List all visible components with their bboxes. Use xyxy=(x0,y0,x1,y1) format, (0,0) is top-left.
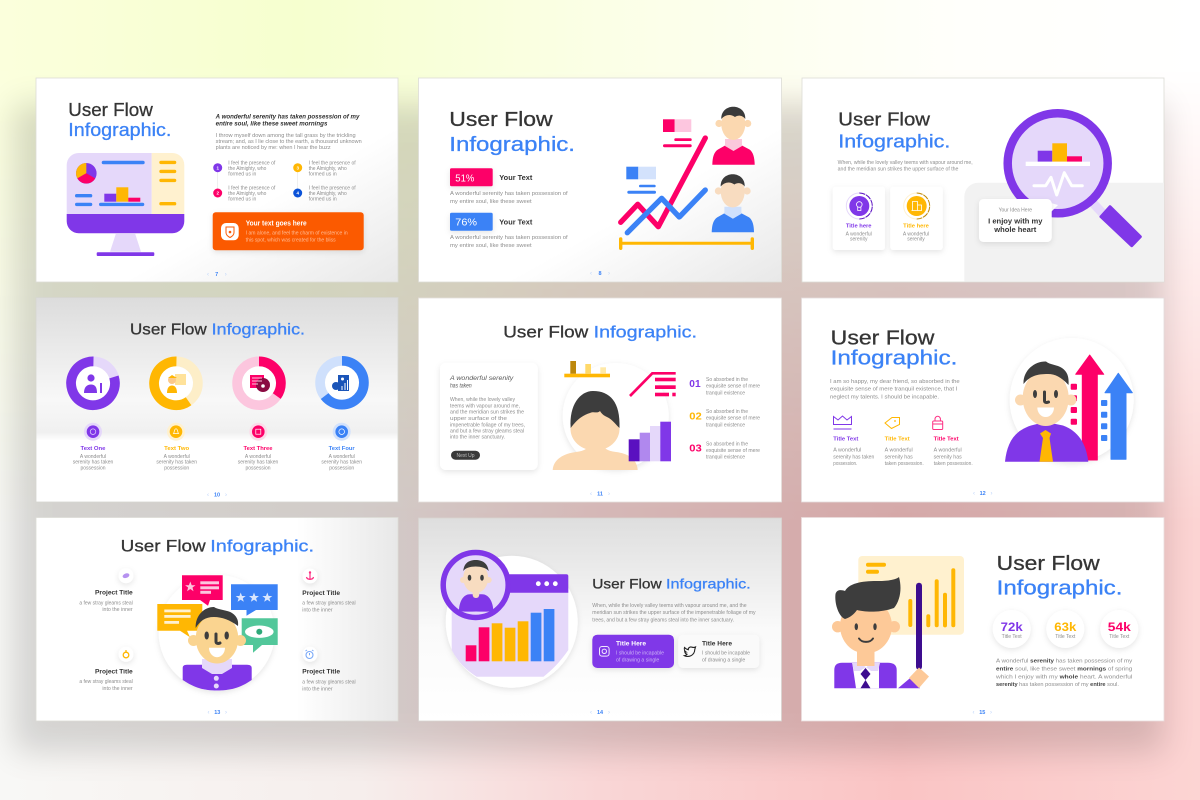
list: numbered points: the Almighty, who xyxy=(228,191,267,197)
title: User Flow xyxy=(130,321,207,338)
page number: ‹ xyxy=(972,710,974,716)
page number: ‹ xyxy=(973,491,975,497)
feature: tag: A wonderful xyxy=(885,448,913,454)
stat: 72k: Title Text xyxy=(1002,634,1022,640)
list: item 02: exquisite sense of mere xyxy=(706,416,760,422)
panel: slide 7 monitor xyxy=(36,78,398,282)
item: Text One xyxy=(73,423,114,471)
card: purple title: serenity xyxy=(850,237,868,243)
stat: 51%: 51% xyxy=(455,172,474,184)
page number: › xyxy=(225,710,227,716)
text block xyxy=(996,659,1133,688)
item: Text Two: serenity has taken xyxy=(156,459,197,465)
browser window with bar chart xyxy=(452,574,568,677)
page number xyxy=(208,710,227,716)
feature: tag: serenity has xyxy=(885,454,913,460)
text block: intro: I throw myself down among the tall grass by the trickling xyxy=(216,133,356,139)
stat: 76% xyxy=(450,213,568,249)
stat: 54k: Title Text xyxy=(1109,634,1130,640)
icon: pink line list xyxy=(630,373,676,396)
page number: › xyxy=(608,271,610,277)
stat: 63k: 63k xyxy=(1054,620,1077,634)
page number: ‹ xyxy=(590,271,592,277)
item: Text Two: A wonderful xyxy=(164,454,190,460)
stat: 76%: 76% xyxy=(455,217,477,229)
title xyxy=(592,575,751,591)
title xyxy=(838,109,950,151)
title xyxy=(997,553,1122,599)
card: yellow title: Title here xyxy=(903,224,929,230)
stat: 76%: A wonderful serenity has taken possession of xyxy=(450,235,568,241)
title xyxy=(121,537,314,556)
panel: slide 14 dashboard xyxy=(418,518,782,721)
arrow: pink xyxy=(1071,355,1104,460)
item: Text One: Text One xyxy=(80,446,106,452)
card: twitter: I should be incapable xyxy=(702,650,750,656)
list: numbered points: the Almighty, who xyxy=(309,166,347,172)
text block: When, while the lovely valley teems with vapour around me, and the xyxy=(592,603,747,609)
title: User Flow xyxy=(831,327,935,349)
text block: intro: entire soul, like these sweet mornings xyxy=(216,122,328,128)
panel: slide 13 speech bubbles xyxy=(36,518,398,721)
item: Text Two xyxy=(156,423,197,471)
page number: › xyxy=(990,710,992,716)
page number: ‹ xyxy=(208,710,210,716)
page number: › xyxy=(990,491,992,497)
feature: bag: A wonderful xyxy=(934,448,962,454)
icon: man avatar xyxy=(183,607,252,690)
text block: intro: plants are noticed by me: when I hear the buzz xyxy=(216,145,331,151)
speech bubble: yellow xyxy=(157,604,202,637)
arrow: blue xyxy=(1101,373,1132,459)
feature: bag: serenity has xyxy=(934,454,962,460)
item: Text Four: serenity has taken xyxy=(321,459,362,465)
list: item 02: So absorbed in the xyxy=(706,409,748,415)
title: User Flow xyxy=(121,537,206,556)
title: User Flow xyxy=(68,100,154,120)
item: project bottom left: Project Title xyxy=(95,669,133,675)
item: Text Three: Text Three xyxy=(244,446,272,452)
item: Text One: serenity has taken xyxy=(73,459,114,465)
text block: neglect my talents. I should be incapable. xyxy=(830,394,939,400)
card: instagram xyxy=(592,635,674,668)
panel: slide 15 presenter xyxy=(802,518,1164,721)
card: text block with button: upper surface of the xyxy=(450,416,507,422)
text block: which I enjoy with my whole heart. A wonderful xyxy=(996,674,1132,680)
list: numbered points: I feel the presence of xyxy=(309,161,356,167)
text block: entire soul, like these sweet mornings of spring xyxy=(996,667,1133,673)
item: project bottom right: into the inner xyxy=(302,686,333,692)
page number xyxy=(590,492,610,498)
title: Infographic. xyxy=(838,131,950,151)
item: Text Two: Text Two xyxy=(164,446,190,452)
text block: When, while the lovely valley teems with vapour around me, xyxy=(838,160,973,166)
card: purple title xyxy=(833,187,885,250)
page number: › xyxy=(608,710,610,716)
page number: › xyxy=(225,492,227,498)
callout: orange text box: this spot, which was created for the bliss xyxy=(246,237,336,243)
page number: 11 xyxy=(597,492,603,498)
card: instagram: Title Here xyxy=(616,640,646,647)
stat: 76%: my entire soul, like these sweet xyxy=(450,243,532,249)
item: project bottom right xyxy=(302,647,356,692)
feature: crown: serenity has taken xyxy=(833,454,875,460)
panel: slide 9 magnifier xyxy=(802,78,1164,282)
item: Text Three: possession xyxy=(245,465,271,471)
text block: trees, and but a few stray gleams steal into the inner sanctuary. xyxy=(592,617,734,623)
decorative white circle xyxy=(159,575,275,691)
item: Text Four: possession xyxy=(329,465,354,471)
card: yellow title: serenity xyxy=(907,237,925,243)
list: numbered points: formed us in xyxy=(228,197,257,203)
title: Infographic. xyxy=(212,321,305,338)
title xyxy=(449,109,575,156)
page number: 13 xyxy=(214,710,220,716)
item: project top right: Project Title xyxy=(302,591,341,597)
list: item 01: So absorbed in the xyxy=(706,377,748,383)
item: Text Three: A wonderful xyxy=(245,454,271,460)
title: Infographic. xyxy=(449,134,575,156)
list: item 02: 02 xyxy=(689,410,702,422)
card: twitter: of drawing a single xyxy=(702,658,746,664)
item: Text Four: Text Four xyxy=(329,446,356,452)
item: project top right: a few stray gleams steal xyxy=(302,601,356,607)
feature: crown: A wonderful xyxy=(833,448,861,454)
callout: idea card: Your Idea Here xyxy=(999,208,1032,214)
title: User Flow xyxy=(503,323,589,342)
decorative white circle xyxy=(446,556,578,688)
feature: bag: taken possession. xyxy=(934,461,973,467)
page number xyxy=(972,710,992,716)
item: Text Three: serenity has taken xyxy=(238,459,279,465)
title: User Flow xyxy=(592,575,663,591)
text block xyxy=(838,160,973,173)
list: item 02 xyxy=(689,409,760,428)
stat: 63k: Title Text xyxy=(1055,634,1076,640)
bar chart: yellow shelf xyxy=(564,361,610,377)
list: item 01: exquisite sense of mere xyxy=(706,384,760,390)
list: numbered points: 3 xyxy=(296,165,299,170)
list: numbered points: I feel the presence of xyxy=(228,161,276,167)
stat: 51%: A wonderful serenity has taken possession of xyxy=(450,191,568,197)
item: Text One: A wonderful xyxy=(80,454,106,460)
line chart with flags xyxy=(621,119,752,248)
decorative white circle xyxy=(1010,338,1134,462)
item: project bottom right: Project Title xyxy=(302,670,341,676)
stat: 76%: Your Text xyxy=(499,219,533,226)
item: project top left: Project Title xyxy=(95,591,133,597)
stat: 54k: 54k xyxy=(1108,620,1131,634)
title: Infographic. xyxy=(594,323,697,342)
list: item 01: 01 xyxy=(689,378,701,390)
card: yellow title: A wonderful xyxy=(903,232,929,238)
title: Infographic. xyxy=(997,577,1122,599)
list: numbered points: I feel the presence of xyxy=(309,186,356,192)
grey corner block xyxy=(964,183,1164,282)
callout: orange text box xyxy=(213,212,364,250)
page number: ‹ xyxy=(590,710,592,716)
panel: slide 10 donuts xyxy=(36,298,398,502)
page number xyxy=(207,492,227,498)
feature: tag: taken possession. xyxy=(885,461,924,467)
page number xyxy=(973,491,992,497)
card: text block with button: into the inner sanctuary. xyxy=(450,435,505,441)
list: item 02: tranquil existence xyxy=(706,422,745,428)
stat: 54k xyxy=(1100,610,1138,648)
callout: orange text box: Your text goes here xyxy=(246,220,307,227)
icon: desktop monitor with charts xyxy=(67,153,184,256)
icon: person pink xyxy=(712,107,755,165)
card: text block with button: and but a few stray gleams steal xyxy=(450,429,524,435)
icon: person portrait xyxy=(553,391,638,470)
panel: slide 11 portrait xyxy=(418,298,782,502)
text block: exquisite sense of mere tranquil existence, that I xyxy=(830,387,957,393)
text block: meridian sun strikes the upper surface of the impenetrable foliage of my xyxy=(592,610,756,616)
item: project bottom left: a few stray gleams steal xyxy=(79,679,133,685)
item: project top right: into the inner xyxy=(302,607,333,613)
stat: 51%: Your Text xyxy=(499,175,533,182)
icon: smiling man with tie xyxy=(1005,361,1088,462)
text block: intro: A wonderful serenity has taken possession of my xyxy=(215,114,360,120)
item: Text Three xyxy=(238,423,279,471)
item: Text Two: possession xyxy=(164,465,189,471)
list: numbered points: 1 xyxy=(216,165,219,170)
card: text block with button: and the meridian sun strikes the xyxy=(450,410,524,416)
text block: and the meridian sun strikes the upper surface of the xyxy=(838,167,959,173)
list: item 01 xyxy=(689,377,760,396)
bar chart: purple xyxy=(629,422,671,461)
card: text block with button xyxy=(440,363,538,470)
item: Text Four: A wonderful xyxy=(329,454,355,460)
page number: 15 xyxy=(979,710,985,716)
title: Infographic. xyxy=(210,537,314,556)
card: text block with button: has taken xyxy=(450,382,472,389)
title xyxy=(68,100,171,140)
list: item 03: So absorbed in the xyxy=(706,441,748,447)
page number xyxy=(590,271,610,277)
title: User Flow xyxy=(449,109,553,131)
page number: ‹ xyxy=(207,492,209,498)
item: project top left: a few stray gleams steal xyxy=(79,600,133,606)
list: item 03: tranquil existence xyxy=(706,455,745,461)
text block: intro xyxy=(215,114,362,151)
page number: › xyxy=(608,492,610,498)
item: project bottom left: into the inner xyxy=(102,686,133,692)
list: item 03: 03 xyxy=(689,442,702,454)
icon: presentation board xyxy=(858,556,964,635)
icon: person blue xyxy=(712,174,754,232)
card: text block with button: teems with vapour around me, xyxy=(450,403,520,409)
title: Infographic. xyxy=(68,120,171,140)
list: item 03: exquisite sense of mere xyxy=(706,448,760,454)
callout: idea card: whole heart xyxy=(993,225,1037,234)
list: numbered points: 4 xyxy=(296,191,299,196)
list: numbered points: the Almighty, who xyxy=(228,166,267,172)
title: User Flow xyxy=(838,109,931,129)
feature: bag xyxy=(933,416,973,467)
list: numbered points: formed us in xyxy=(309,172,337,178)
page number: 12 xyxy=(980,491,986,497)
feature: crown: possession. xyxy=(833,461,857,467)
card: text block with button: A wonderful serenity xyxy=(449,375,514,382)
icon: presenter with pointer xyxy=(832,577,929,688)
page number: › xyxy=(225,272,227,278)
list: numbered points: formed us in xyxy=(228,172,257,178)
item: project bottom right: a few stray gleams steal xyxy=(302,679,356,685)
speech bubble: green xyxy=(242,618,278,653)
page number xyxy=(207,272,227,278)
text block xyxy=(592,603,756,623)
card: instagram: I should be incapable xyxy=(616,650,664,656)
stat: 51%: my entire soul, like these sweet xyxy=(450,199,532,205)
page number: ‹ xyxy=(207,272,209,278)
item: project top left xyxy=(79,568,134,613)
card: twitter: Title Here xyxy=(702,640,732,647)
page number: 8 xyxy=(598,271,602,277)
page number: ‹ xyxy=(590,492,592,498)
feature: crown: Title Text xyxy=(833,437,858,443)
decorative white circle xyxy=(563,363,669,469)
callout: idea card xyxy=(979,199,1058,242)
card: twitter xyxy=(678,635,759,668)
feature: tag: Title Text xyxy=(885,437,910,443)
icon: magnifier with chart xyxy=(1008,113,1140,246)
text block: intro: stream; and, as I lie close to the earth, a thousand unknown xyxy=(216,139,362,145)
text block: A wonderful serenity has taken possession of my xyxy=(996,659,1133,665)
page number: 10 xyxy=(214,492,220,498)
title xyxy=(831,327,957,370)
title: Infographic. xyxy=(831,348,957,370)
text block: I am so happy, my dear friend, so absorbed in the xyxy=(830,379,960,385)
title xyxy=(130,321,305,338)
list: item 01: tranquil existence xyxy=(706,390,745,396)
list: numbered points: 2 xyxy=(216,191,219,196)
list: numbered points: formed us in xyxy=(309,197,337,203)
page number: 14 xyxy=(597,710,604,716)
list: item 03 xyxy=(689,441,760,461)
card: text block with button: impenetrable foliage of my trees, xyxy=(450,422,525,428)
feature: crown xyxy=(833,416,875,467)
icon: magnifier with avatar xyxy=(443,552,508,618)
list: numbered points: I feel the presence of xyxy=(228,186,276,192)
panel: slide 12 arrows xyxy=(802,298,1164,502)
title: User Flow xyxy=(997,553,1100,575)
card: instagram: of drawing a single xyxy=(616,658,660,664)
card: yellow title xyxy=(890,187,943,250)
page number: 7 xyxy=(215,272,218,278)
page number xyxy=(590,710,610,716)
panel: slide 8 growth chart xyxy=(418,78,782,282)
item: project bottom left xyxy=(79,647,134,692)
stat: 63k xyxy=(1046,610,1084,648)
card: text block with button: When, while the lovely valley xyxy=(450,397,516,403)
donut chart: purple xyxy=(66,356,120,411)
item: project top right xyxy=(302,568,356,613)
card: text block with button: Next Up xyxy=(456,453,475,459)
title xyxy=(503,323,697,342)
callout: idea card: I enjoy with my xyxy=(988,216,1043,225)
card: purple title: A wonderful xyxy=(846,232,872,238)
donut chart: pink xyxy=(237,361,281,405)
callout: orange text box: I am alone, and feel the charm of existence in xyxy=(246,230,348,236)
stat: 51% xyxy=(450,168,568,205)
stat: 72k xyxy=(993,610,1031,648)
feature: tag xyxy=(885,418,924,467)
feature: bag: Title Text xyxy=(934,437,959,443)
stat: 72k: 72k xyxy=(1001,620,1023,634)
item: project top left: into the inner xyxy=(102,607,133,613)
card: purple title: Title here xyxy=(846,224,872,230)
list: numbered points xyxy=(213,161,356,203)
speech bubble: blue xyxy=(231,584,278,616)
item: Text Four xyxy=(321,423,362,471)
title: Infographic. xyxy=(666,575,751,591)
text block: serenity has taken possession of my entire soul. xyxy=(996,682,1119,688)
speech bubble: pink xyxy=(182,575,223,606)
list: numbered points: the Almighty, who xyxy=(309,191,347,197)
donut chart: yellow xyxy=(145,353,207,414)
item: Text One: possession xyxy=(80,465,106,471)
text block xyxy=(830,379,960,400)
donut chart: blue xyxy=(320,361,364,405)
